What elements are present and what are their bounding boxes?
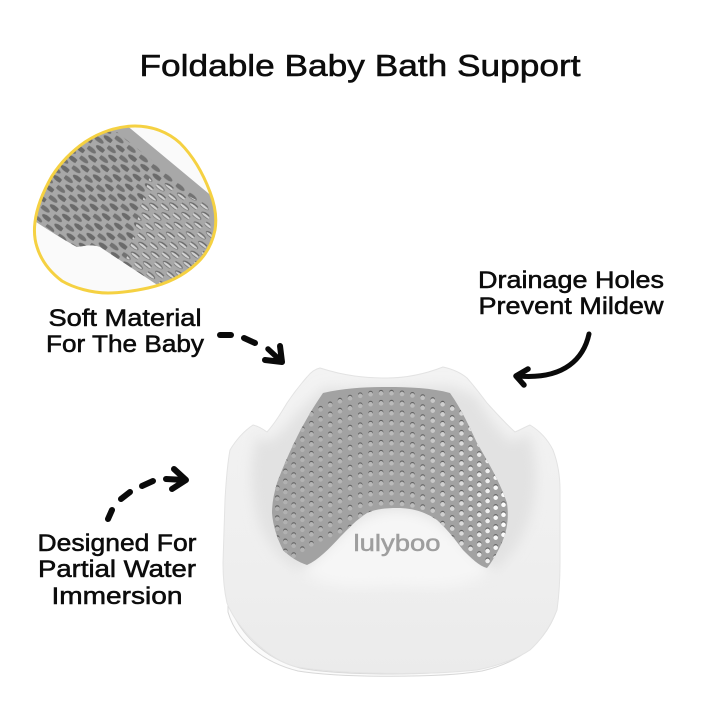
material mesh (36, 128, 214, 284)
arrow: immersion (108, 469, 186, 519)
title: Foldable Baby Bath Support (140, 48, 581, 83)
label: soft material: For The Baby (46, 331, 205, 358)
label: drainage holes: Drainage Holes (478, 267, 664, 294)
logo: lulyboo: lulyboo (354, 530, 440, 556)
base rim (228, 600, 556, 676)
arrow: soft material (220, 335, 282, 362)
inset: material close-up (30, 120, 220, 300)
label: drainage holes: Prevent Mildew (478, 293, 664, 320)
label: partial water immersion: Immersion (52, 583, 182, 610)
product: bath support (223, 367, 560, 676)
label: soft material: Soft Material (48, 305, 202, 332)
soft shading (252, 386, 535, 564)
seat body (223, 367, 560, 673)
label: partial water immersion: Designed For (38, 530, 196, 557)
mesh seat (272, 387, 508, 568)
label: partial water immersion: Partial Water (38, 556, 196, 583)
arrow: drainage holes (516, 334, 589, 385)
